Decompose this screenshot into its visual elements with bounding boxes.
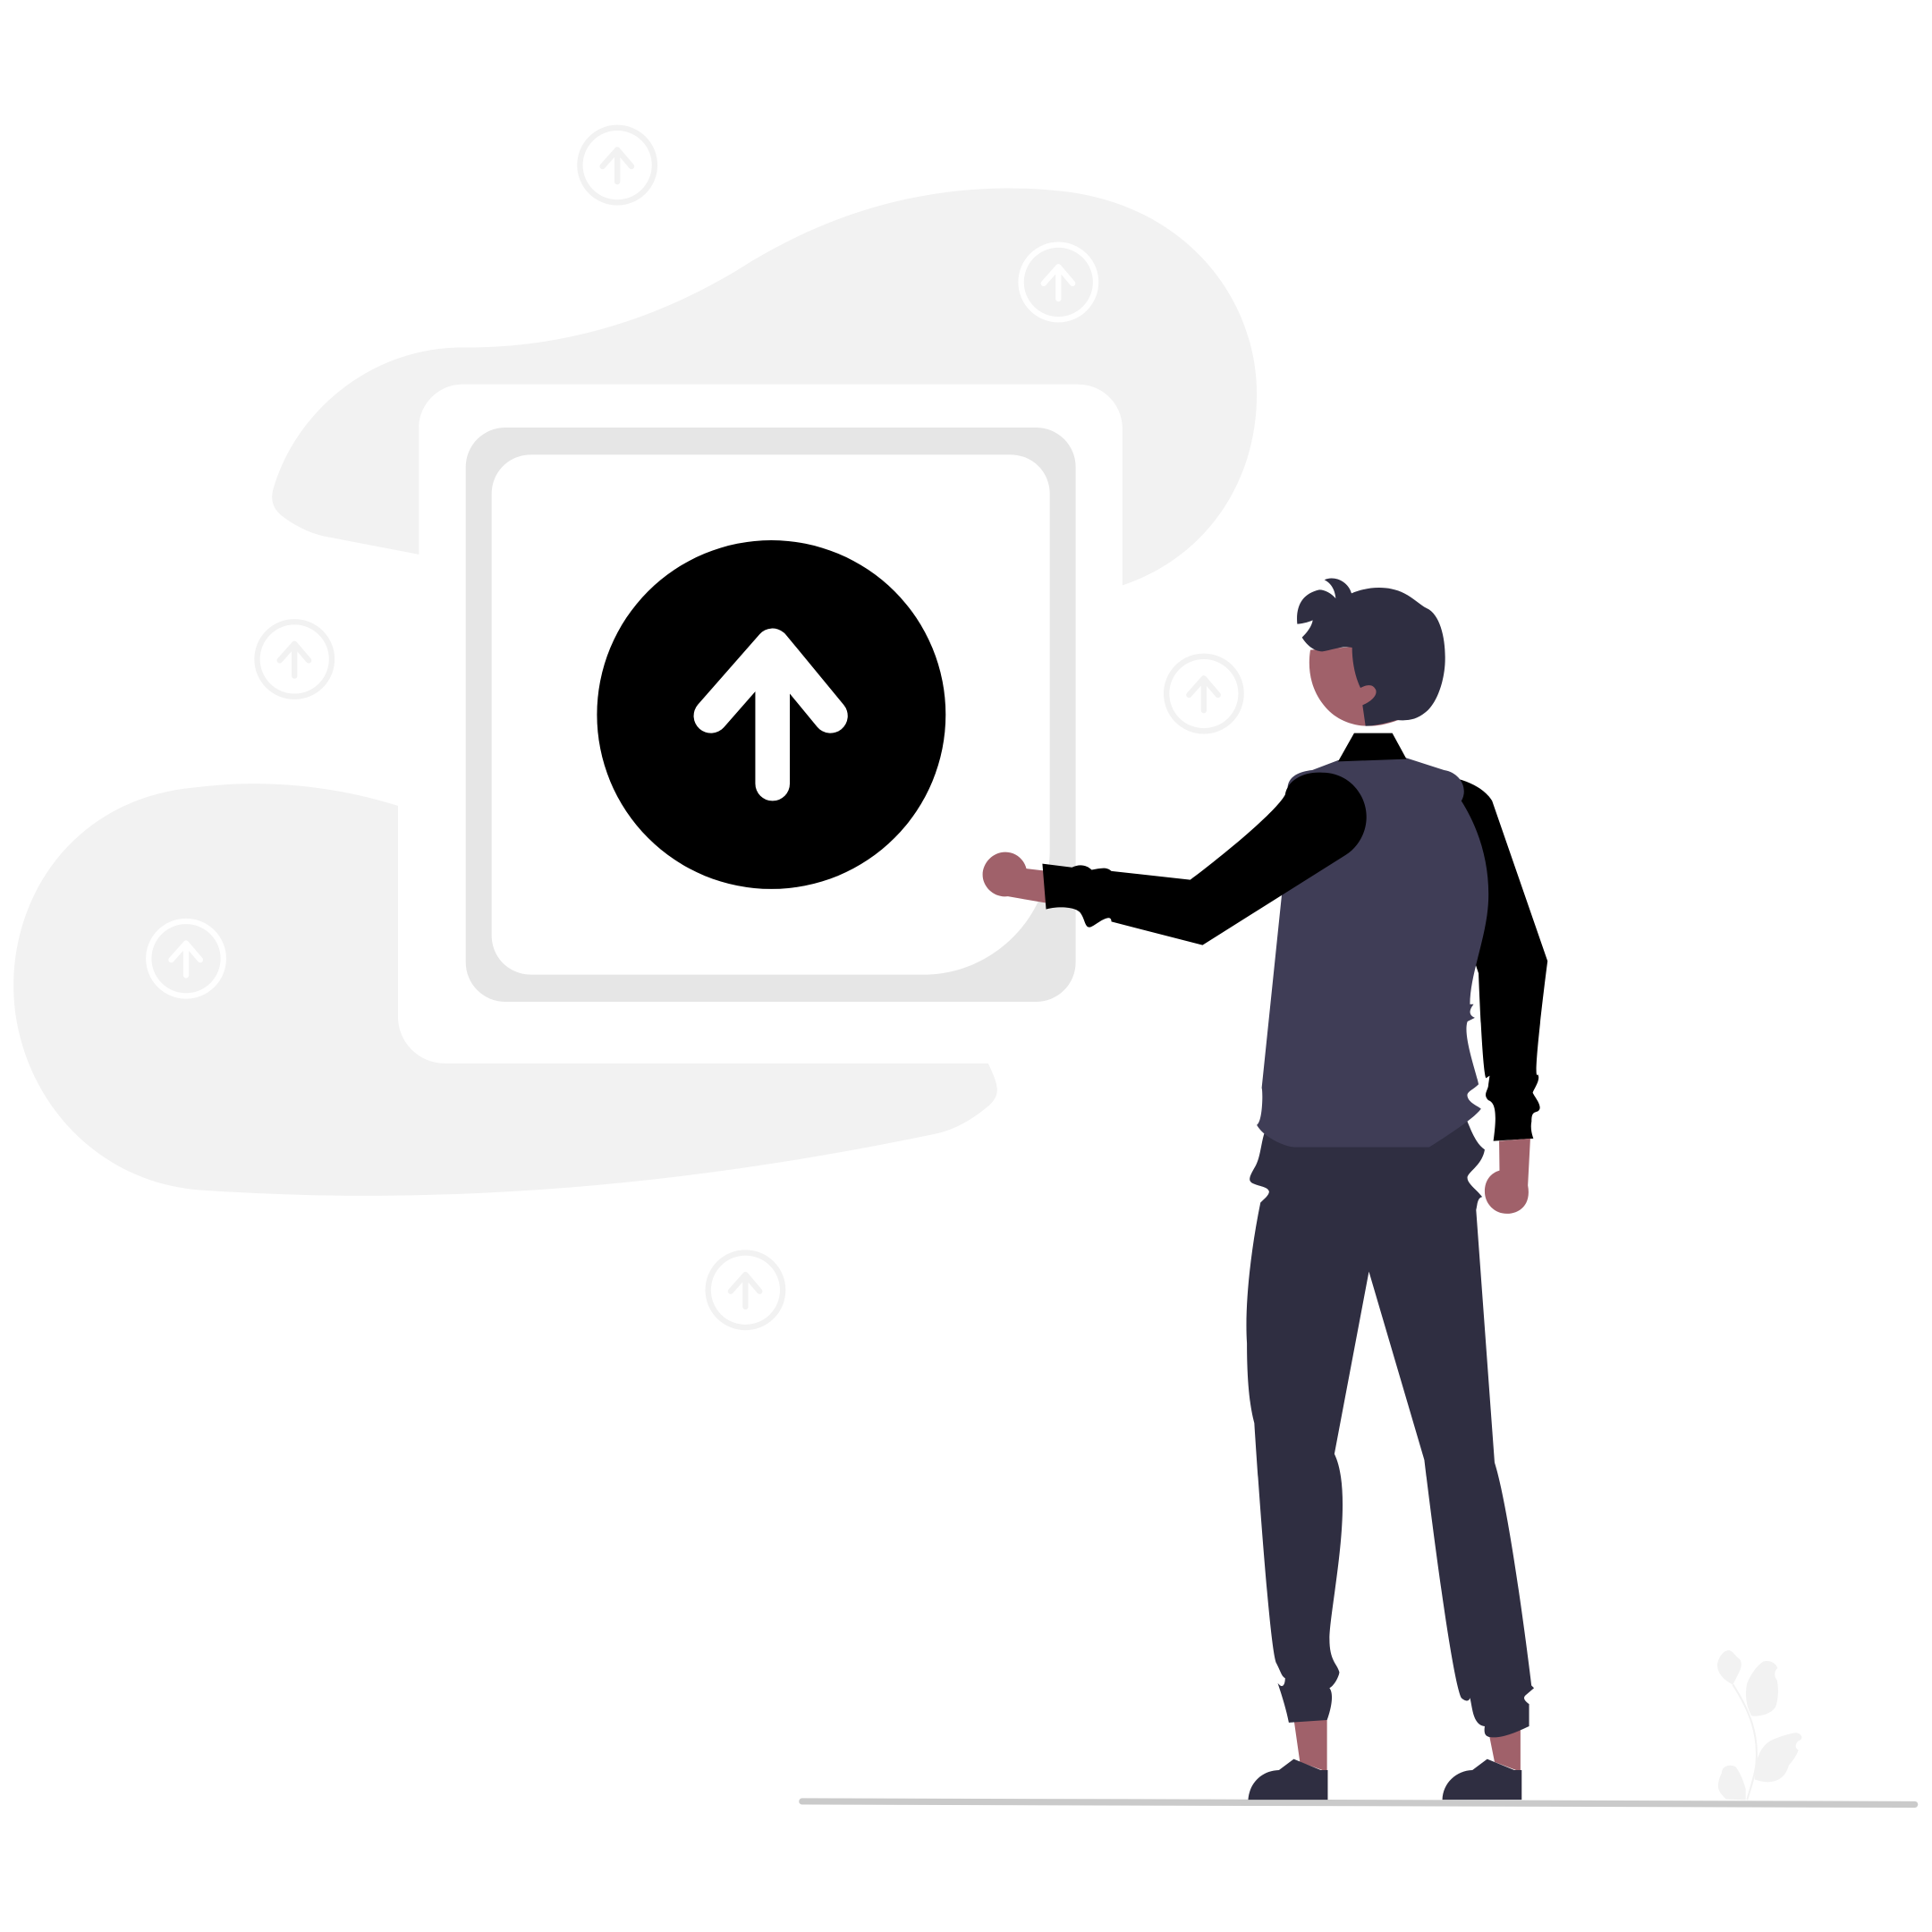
person: left shoe [1248,1759,1327,1800]
person: near hand [983,852,1047,903]
person: far hand [1485,1139,1530,1214]
background blob: top [272,188,1257,591]
person: trousers [1246,1119,1534,1737]
person: vest [1257,758,1488,1147]
person: head [1297,578,1445,726]
person: right shoe [1443,1759,1521,1800]
person: collar [1338,733,1406,761]
icon: small upload circle 1 [580,128,655,202]
plant stem [1733,1684,1757,1800]
icon: small upload circle 4 [1166,657,1241,731]
white arrow [711,646,830,784]
person: ankles [1293,1719,1521,1772]
white card [398,385,1123,1063]
person: face [1309,647,1398,726]
icon: small upload circle 6 [708,1253,783,1327]
background blob: bottom [13,784,997,1196]
person: far arm sleeve [1442,776,1547,1141]
plant [1717,1650,1801,1800]
black circle [597,540,945,889]
plant leaves [1717,1650,1801,1800]
ground line [802,1801,1915,1804]
icon: small upload circle 5 [148,921,224,996]
button frame [466,428,1076,1002]
icon: small upload circle 3 [257,622,332,697]
icon: small upload circle 2 [1021,245,1096,319]
button panel [466,428,1076,1002]
person: hair [1297,578,1445,726]
button inner face [492,454,1050,975]
upload icon [597,540,945,889]
person [983,578,1547,1800]
person: near arm sleeve [1042,773,1367,945]
